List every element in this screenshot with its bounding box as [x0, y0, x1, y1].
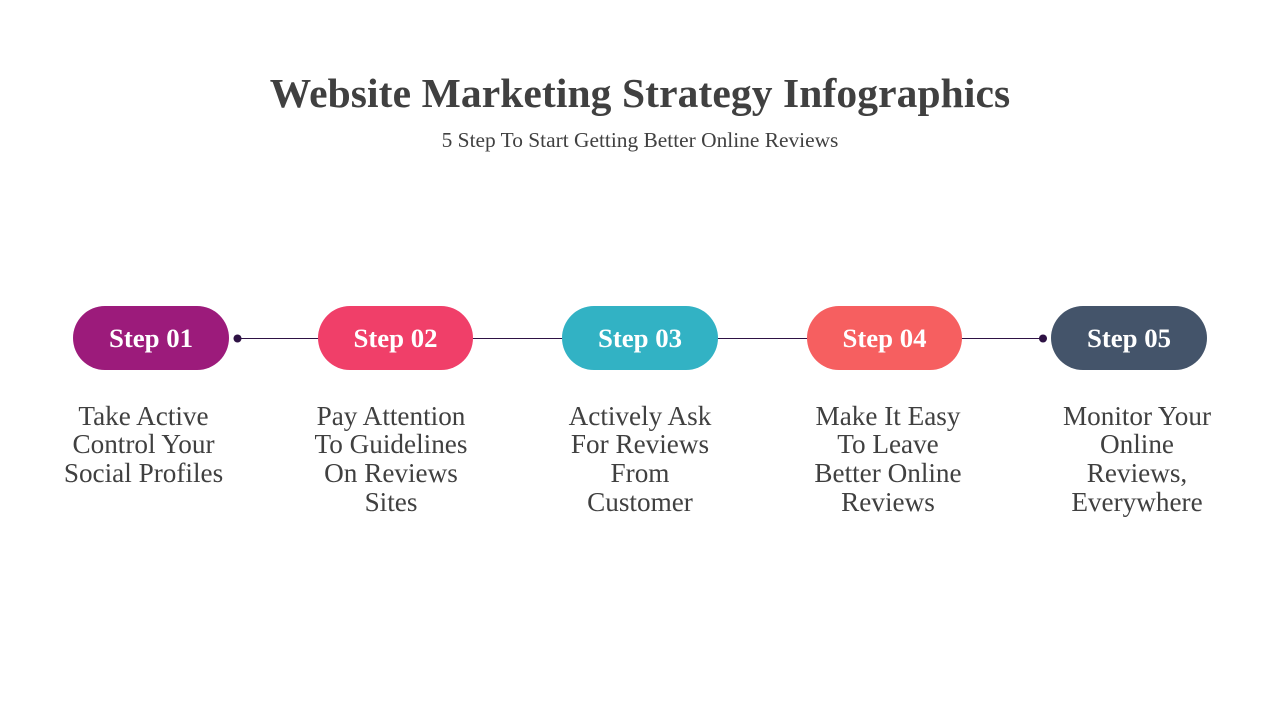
step 5 description: Monitor Your — [1063, 400, 1211, 430]
step 2 description: Sites — [365, 487, 417, 517]
step 4 description: Make It Easy — [816, 400, 960, 430]
step 2 description: Pay Attention — [317, 400, 465, 430]
step 4 description — [814, 400, 962, 517]
step 1 description — [64, 400, 223, 488]
step 5 description: Online — [1100, 429, 1174, 459]
step 1 description: Social Profiles — [64, 458, 223, 488]
step 5 pill: Step 05 — [1087, 323, 1171, 353]
step 4 pill: Step 04 — [842, 323, 927, 353]
step 3 description: For Reviews — [571, 429, 709, 459]
step 4 description: To Leave — [837, 429, 939, 459]
step 3 pill — [562, 306, 718, 370]
step 1 description: Take Active — [78, 400, 209, 430]
step 5 pill — [1051, 306, 1207, 370]
step 2 description: On Reviews — [324, 458, 458, 488]
step 1 pill: Step 01 — [109, 323, 193, 353]
step 5 description: Everywhere — [1071, 487, 1203, 517]
step 4 pill — [807, 306, 962, 370]
step 5 description — [1063, 400, 1211, 517]
step 5 description: Reviews, — [1087, 458, 1187, 488]
step 3 description: Actively Ask — [569, 400, 711, 430]
step 2 description: To Guidelines — [315, 429, 467, 459]
step 1 pill — [73, 306, 229, 370]
step 4 description: Better Online — [814, 458, 962, 488]
step 1 description: Control Your — [72, 429, 215, 459]
step 3 pill: Step 03 — [598, 323, 682, 353]
step 2 pill — [318, 306, 473, 370]
title: Website Marketing Strategy Infographics — [270, 70, 1010, 116]
step 3 description — [568, 400, 712, 517]
subtitle: 5 Step To Start Getting Better Online Reviews — [442, 128, 838, 152]
step 2 pill: Step 02 — [353, 323, 438, 353]
step 3 description: Customer — [587, 487, 693, 517]
step 4 description: Reviews — [841, 487, 935, 517]
step 2 description — [315, 400, 467, 517]
step 3 description: From — [611, 458, 669, 488]
